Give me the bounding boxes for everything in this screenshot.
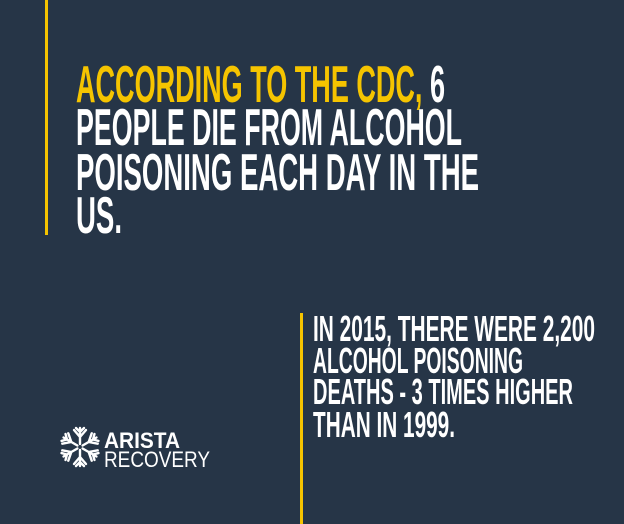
text block: 2015 statistic: THAN IN 1999. (313, 404, 455, 445)
text block: 2015 statistic (313, 308, 595, 445)
heading: CDC statistic: US. (76, 187, 122, 245)
logo: Arista Recovery (61, 428, 210, 472)
logo: Arista Recovery: ARISTA (104, 428, 180, 453)
accent bar: bottom (300, 313, 303, 524)
accent bar: top (45, 0, 48, 235)
heading: CDC statistic (76, 56, 479, 245)
logo: Arista Recovery: RECOVERY (104, 447, 210, 472)
icon: flower (61, 428, 99, 466)
